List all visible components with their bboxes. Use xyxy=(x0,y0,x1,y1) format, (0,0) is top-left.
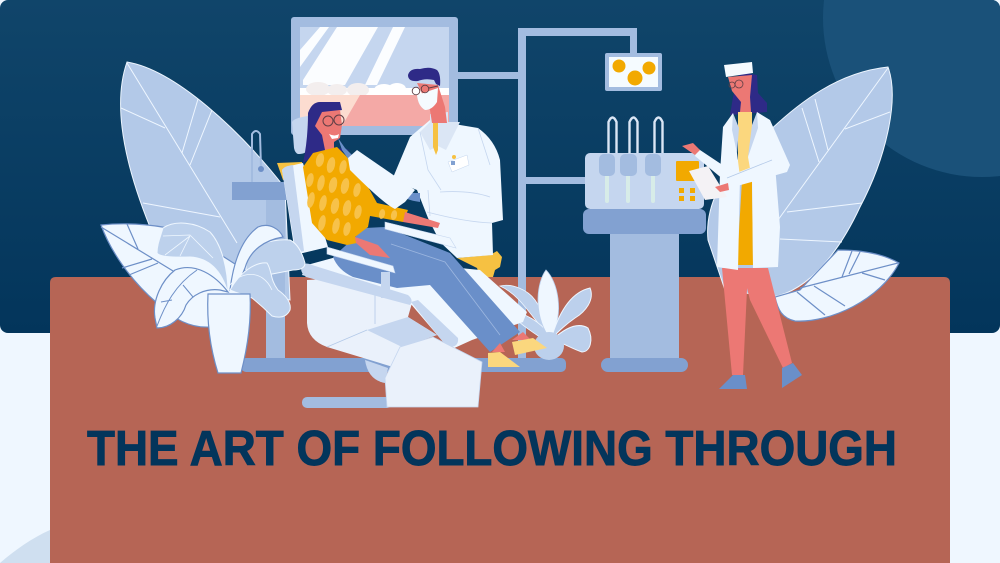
headrest xyxy=(292,116,308,154)
nurse hair xyxy=(730,72,767,115)
shoes xyxy=(488,338,547,367)
patient face xyxy=(315,110,342,150)
foot block xyxy=(385,337,482,407)
dentist head xyxy=(417,83,447,123)
nurse hand xyxy=(715,183,729,192)
plant upper leaf xyxy=(157,223,228,293)
foot bar xyxy=(302,397,392,408)
dentist mask xyxy=(417,88,438,110)
chair base body xyxy=(307,275,437,367)
nurse dress skirt xyxy=(737,180,753,265)
nurse xyxy=(682,62,802,389)
nurse extended arm and hand xyxy=(695,148,730,185)
nurse legs xyxy=(722,268,792,375)
sweater dots xyxy=(305,152,398,237)
title: THE ART OF FOLLOWING THROUGH xyxy=(87,421,897,476)
floor base bar xyxy=(241,358,566,372)
dental instrument unit xyxy=(583,118,706,372)
dentist arm xyxy=(348,150,415,209)
back rest xyxy=(282,163,328,253)
dentist lapels and collar xyxy=(420,112,460,150)
icon: potted plant on left xyxy=(154,223,305,373)
trouser crease xyxy=(391,244,500,335)
leg rest cushion xyxy=(411,300,458,347)
plant top right leaf xyxy=(245,240,305,290)
decorative pale corner shape xyxy=(0,530,50,563)
icon: right leaf, white lower xyxy=(775,250,899,321)
dentist hair xyxy=(408,68,440,86)
patient hands xyxy=(355,212,440,258)
nurse glasses xyxy=(729,80,743,88)
nurse clipboard xyxy=(689,166,727,200)
pedestal disc xyxy=(365,360,388,383)
dentist glasses xyxy=(412,85,438,95)
plant veins xyxy=(163,235,272,290)
patient hair xyxy=(303,102,350,163)
icon: overhead dental lamp xyxy=(605,53,662,91)
dentist coat folds xyxy=(420,128,492,223)
dental mirror tool xyxy=(338,138,353,160)
nurse hat xyxy=(724,62,753,77)
dentist xyxy=(392,68,503,258)
nurse dress top xyxy=(738,112,752,174)
icon: lower left white leaf xyxy=(101,224,260,327)
dentist stool xyxy=(457,251,502,277)
icon: large left leaf xyxy=(121,62,290,300)
armrests xyxy=(327,222,456,273)
armrest post xyxy=(381,272,390,298)
dentist coat xyxy=(392,120,503,258)
plant rear leaf xyxy=(230,225,283,290)
patient xyxy=(303,102,547,367)
patient smile xyxy=(329,134,339,139)
name badge xyxy=(448,155,469,172)
icon: small potted plant on right xyxy=(500,270,591,360)
plant lower left leaf xyxy=(154,268,228,328)
window with landscape xyxy=(291,17,458,135)
nurse lapels xyxy=(732,112,758,157)
patient glasses xyxy=(323,115,344,126)
seat xyxy=(302,256,527,350)
chair head pad xyxy=(277,162,303,180)
seat side cushion xyxy=(301,264,412,305)
dental chair xyxy=(277,116,527,408)
panel: terracotta floor panel xyxy=(50,277,950,563)
nurse shoes xyxy=(719,363,802,389)
nurse folded sleeve xyxy=(726,120,790,188)
nurse neck and face xyxy=(728,75,752,112)
glove xyxy=(397,193,420,202)
ankles xyxy=(492,332,531,352)
dentist tie xyxy=(433,117,438,155)
icon: right leaf, large xyxy=(708,67,892,297)
dental arm poles and overhead lamp arm xyxy=(458,28,637,360)
side tray stand xyxy=(232,131,287,360)
patient sweater xyxy=(303,147,408,245)
nurse coat xyxy=(717,112,780,270)
plant pot xyxy=(208,294,250,373)
panel: navy wall background xyxy=(0,0,1000,333)
plant right droop leaf xyxy=(230,263,290,317)
patient trousers xyxy=(333,227,520,352)
chair base inset xyxy=(367,317,437,347)
